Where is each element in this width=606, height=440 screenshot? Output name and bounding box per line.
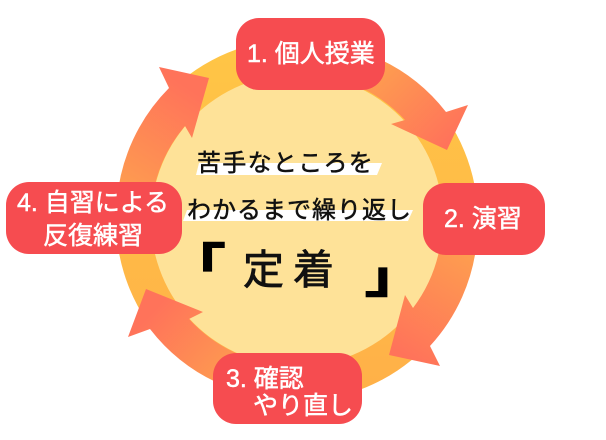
text: closing bracket: 」 <box>365 253 424 302</box>
text: second line: わかるまで繰り返し <box>187 197 412 224</box>
arrow: self-study to individual lesson <box>117 67 209 200</box>
arrow: practice to review <box>389 240 477 366</box>
step 3 badge <box>213 353 362 424</box>
step 3 badge: やり直し <box>253 392 353 420</box>
arrow: review to self-study <box>128 289 240 386</box>
step 2 badge: 2. 演習 <box>444 205 522 233</box>
inner circle <box>151 74 443 366</box>
step 4 badge: 4. 自習による <box>17 189 169 217</box>
step 2 badge <box>423 183 545 255</box>
step 3 badge: 3. 確認 <box>226 365 304 393</box>
text: opening bracket: 「 <box>166 241 225 290</box>
step 1 badge: 1. 個人授業 <box>247 40 375 68</box>
highlight: first line <box>196 163 382 175</box>
text: teichaku: 定着 <box>243 247 343 293</box>
step 4 badge <box>6 182 182 254</box>
highlight: second line <box>183 210 413 221</box>
arrow: individual lesson to practice <box>355 55 468 150</box>
outer ring <box>116 39 478 401</box>
text: first line: 苦手なところを <box>197 150 374 177</box>
step 1 badge <box>236 18 385 90</box>
step 4 badge: 反復練習 <box>43 222 143 250</box>
